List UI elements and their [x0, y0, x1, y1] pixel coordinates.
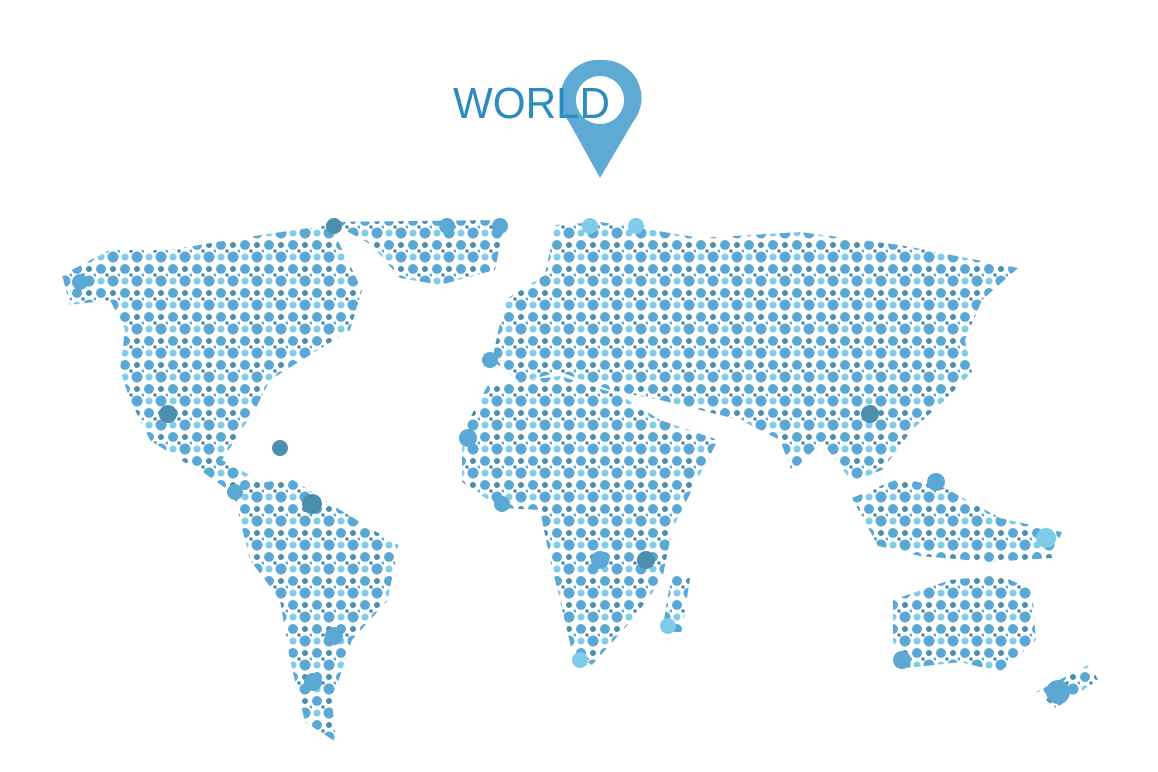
island: Madagascar: [662, 572, 690, 632]
continent: Eurasia: [492, 222, 1018, 482]
heading text: WORLD: [453, 79, 610, 128]
island: New Zealand: [1036, 664, 1098, 708]
map: dotted world: [62, 220, 1098, 742]
title: WORLD with pin: [453, 60, 642, 178]
continent: Australia: [893, 575, 1036, 672]
continent: Greenland: [330, 220, 505, 285]
continent: South America: [232, 478, 398, 742]
accent dots: [72, 218, 1070, 704]
continent: Africa: [462, 376, 718, 665]
icon: location pin: [560, 60, 642, 178]
continent: North America: [62, 225, 362, 502]
islands: Southeast Asia: [852, 478, 1062, 562]
